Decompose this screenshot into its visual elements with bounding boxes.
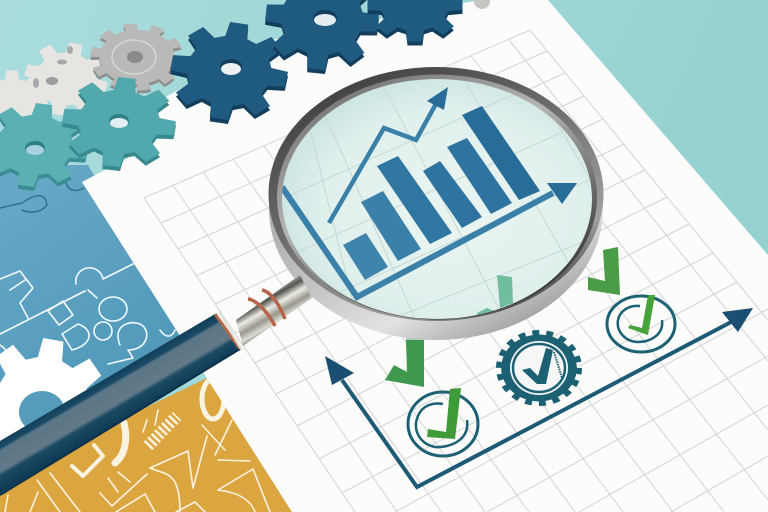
dark rim [268, 67, 604, 321]
gear: small grey at top [474, 0, 490, 9]
gear: navy top [260, 0, 384, 78]
green check: right [588, 247, 620, 295]
gear: light white [0, 35, 116, 130]
rim highlight [277, 74, 597, 320]
icon: check in circle right [607, 295, 675, 352]
chart axes with arrows [325, 308, 753, 487]
magnified chart [282, 81, 590, 318]
white gear on blue sheet [0, 338, 102, 441]
gear: teal right [55, 72, 183, 176]
green check behind lens: left [385, 322, 425, 387]
gear: navy right [368, 0, 462, 46]
gear: grey [98, 28, 176, 89]
lens glass [282, 79, 592, 319]
magnifying glass [0, 55, 620, 495]
icon: gear with check [499, 333, 579, 403]
gear: navy centre [161, 15, 297, 131]
pen handle [0, 275, 312, 495]
panel: blue puzzle sheet [0, 165, 180, 390]
icon: check in circle left [408, 388, 478, 456]
panel: orange doodle sheet [0, 378, 292, 512]
gear: teal left [0, 97, 96, 197]
metal lens wall [269, 78, 603, 340]
